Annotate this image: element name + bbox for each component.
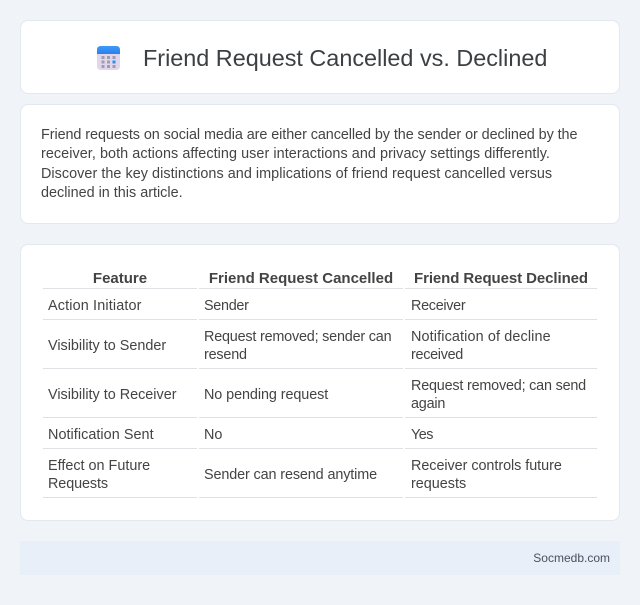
table rows: Request removed; sender can — [204, 329, 391, 345]
table rows: Receiver controls future — [411, 458, 562, 474]
table header: Friend Request Declined — [414, 270, 588, 287]
table rows: resend — [204, 347, 247, 363]
table rows: No pending request — [204, 387, 328, 403]
footer bar — [20, 541, 620, 575]
table rows: Visibility to Receiver — [48, 387, 176, 403]
table rows: Receiver — [411, 298, 465, 314]
intro text: Friend requests on social media are either cancelled by the sender or declined by the — [41, 127, 577, 143]
panel: introduction — [20, 104, 620, 224]
table rows: again — [411, 396, 445, 412]
table rows: Action Initiator — [48, 298, 142, 314]
footer source label: Socmedb.com — [533, 551, 610, 565]
table rows: Request removed; can send — [411, 378, 586, 394]
panel: comparison table — [20, 244, 620, 521]
table header: Feature — [93, 270, 147, 287]
panel: header — [20, 20, 620, 94]
table rows: Sender can resend anytime — [204, 467, 377, 483]
intro text — [41, 127, 577, 201]
table rows: Requests — [48, 476, 108, 492]
table rows: No — [204, 427, 222, 443]
icon: calendar — [97, 46, 120, 70]
table header — [93, 270, 588, 287]
table rows — [43, 288, 597, 498]
title: Friend Request Cancelled vs. Declined — [143, 45, 547, 71]
intro text: declined in this article. — [41, 185, 183, 201]
table rows: Visibility to Sender — [48, 338, 166, 354]
table rows: Notification of decline — [411, 329, 551, 345]
intro text: receiver, both actions affecting user interactions and privacy settings differently. — [41, 146, 550, 162]
intro text: Discover the key distinctions and implications of friend request cancelled versus — [41, 166, 552, 182]
table header: Friend Request Cancelled — [209, 270, 393, 287]
table rows: requests — [411, 476, 466, 492]
table rows: Effect on Future — [48, 458, 150, 474]
table rows: received — [411, 347, 463, 363]
table rows: Notification Sent — [48, 427, 154, 443]
table rows: Sender — [204, 298, 249, 314]
table rows: Yes — [411, 427, 433, 443]
